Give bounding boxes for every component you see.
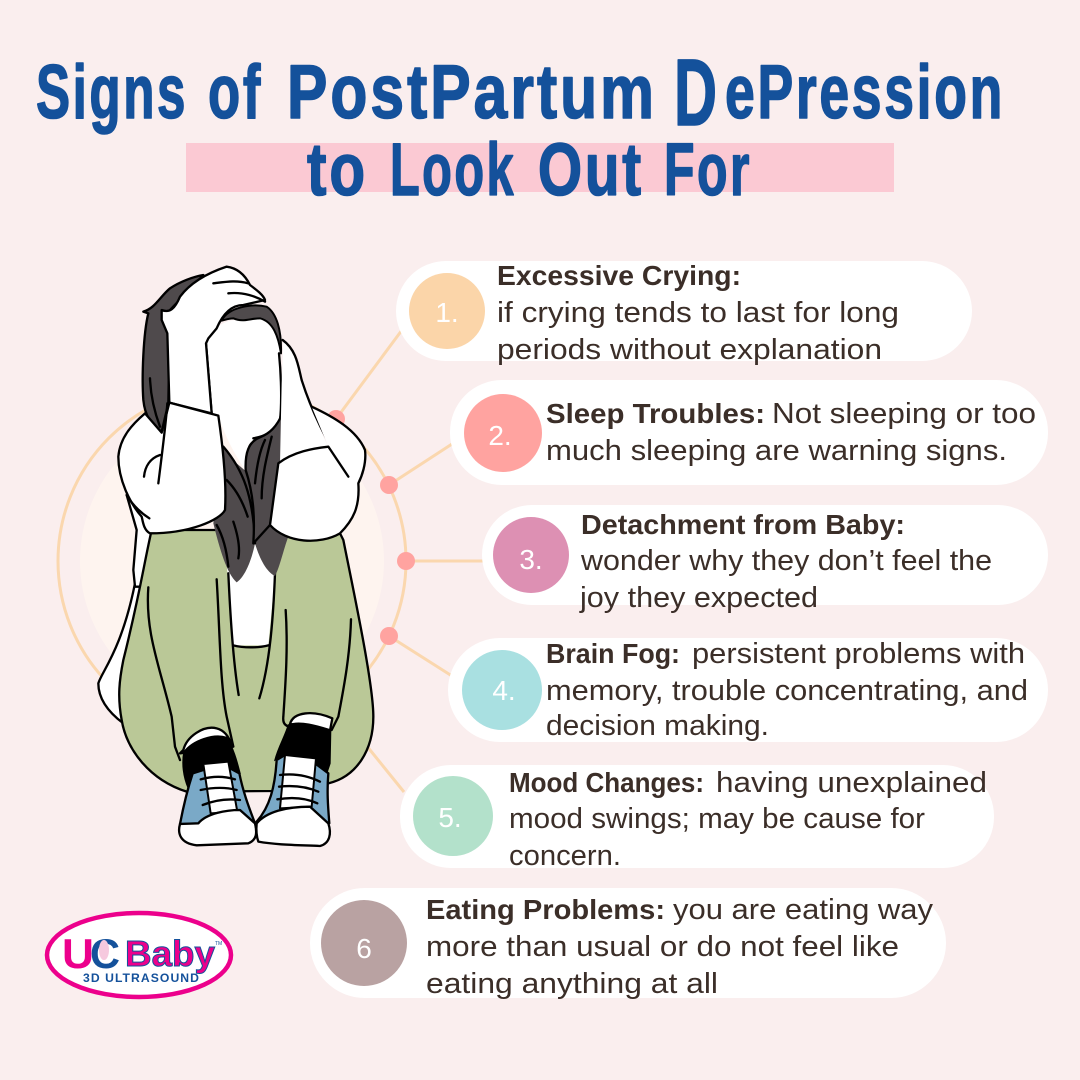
item 2: sleep troubles: Sleep Troubles: — [546, 398, 765, 429]
item 1: excessive crying: 1. — [435, 297, 459, 328]
title: PostPartum — [287, 50, 657, 135]
title highlight bar — [186, 143, 894, 192]
item 3: detachment from baby — [482, 505, 1048, 614]
logo: UC Baby 3D Ultrasound: U — [62, 930, 94, 977]
title: of — [208, 50, 263, 135]
logo: UC Baby 3D Ultrasound: TM — [215, 941, 222, 947]
illustration: woman holding head — [98, 267, 373, 846]
item 6: eating problems — [310, 888, 946, 1000]
background circles and connectors — [58, 330, 484, 792]
item 4: brain fog: 4. — [492, 675, 516, 706]
item 6: eating problems: you are eating way — [673, 894, 934, 926]
item 5: mood changes: Mood Changes: — [509, 767, 704, 798]
item 5: mood changes — [400, 765, 994, 872]
logo: UC Baby 3D Ultrasound: 3D ULTRASOUND — [83, 973, 200, 985]
title: to — [307, 128, 368, 211]
item 5: mood changes: having unexplained — [716, 767, 987, 799]
item 2: sleep troubles: Not sleeping or too — [772, 398, 1036, 430]
title: For — [664, 128, 752, 211]
item 6: eating problems: Eating Problems: — [426, 894, 665, 925]
item 4: brain fog: persistent problems with — [692, 638, 1025, 670]
item 6: eating problems: 6 — [356, 933, 372, 964]
item 1: excessive crying: periods without explanation — [497, 334, 882, 366]
item 2: sleep troubles: much sleeping are warning signs. — [546, 435, 1007, 467]
item 5: mood changes: 5. — [438, 802, 462, 833]
item 4: brain fog: memory, trouble concentrating, and — [546, 675, 1028, 707]
hair — [213, 410, 288, 582]
item 4: brain fog: Brain Fog: — [546, 638, 680, 669]
shoes — [179, 713, 332, 846]
item 5: mood changes: concern. — [509, 840, 621, 872]
item 4: brain fog: decision making. — [546, 710, 769, 742]
item 1: excessive crying — [396, 260, 972, 366]
title: Signs — [36, 50, 188, 135]
item 6: eating problems: more than usual or do not feel like — [426, 931, 899, 963]
item 3: detachment from baby: 3. — [519, 544, 543, 575]
title — [36, 40, 1005, 211]
logo: UC Baby 3D Ultrasound: Baby — [125, 933, 215, 974]
item 1: excessive crying: if crying tends to last for long — [497, 297, 899, 329]
item 1: excessive crying: Excessive Crying: — [497, 260, 741, 291]
logo: UC Baby 3D Ultrasound: C — [90, 930, 120, 977]
left hand and arm with sleeve — [118, 267, 265, 533]
item 5: mood changes: mood swings; may be cause for — [509, 803, 926, 835]
item 2: sleep troubles: 2. — [488, 420, 512, 451]
item 6: eating problems: eating anything at all — [426, 968, 718, 1000]
item 3: detachment from baby: Detachment from Baby: — [581, 509, 905, 540]
title: Look — [390, 128, 516, 211]
face — [207, 319, 282, 477]
item 4: brain fog — [448, 638, 1048, 742]
logo: UC Baby 3D Ultrasound — [47, 913, 231, 997]
right arm and sleeve — [270, 340, 365, 541]
title: Out — [538, 128, 644, 211]
title: D — [674, 40, 720, 146]
item 3: detachment from baby: wonder why they don’t feel the — [580, 545, 992, 577]
item 3: detachment from baby: joy they expected — [579, 582, 818, 614]
item 2: sleep troubles — [450, 380, 1048, 485]
